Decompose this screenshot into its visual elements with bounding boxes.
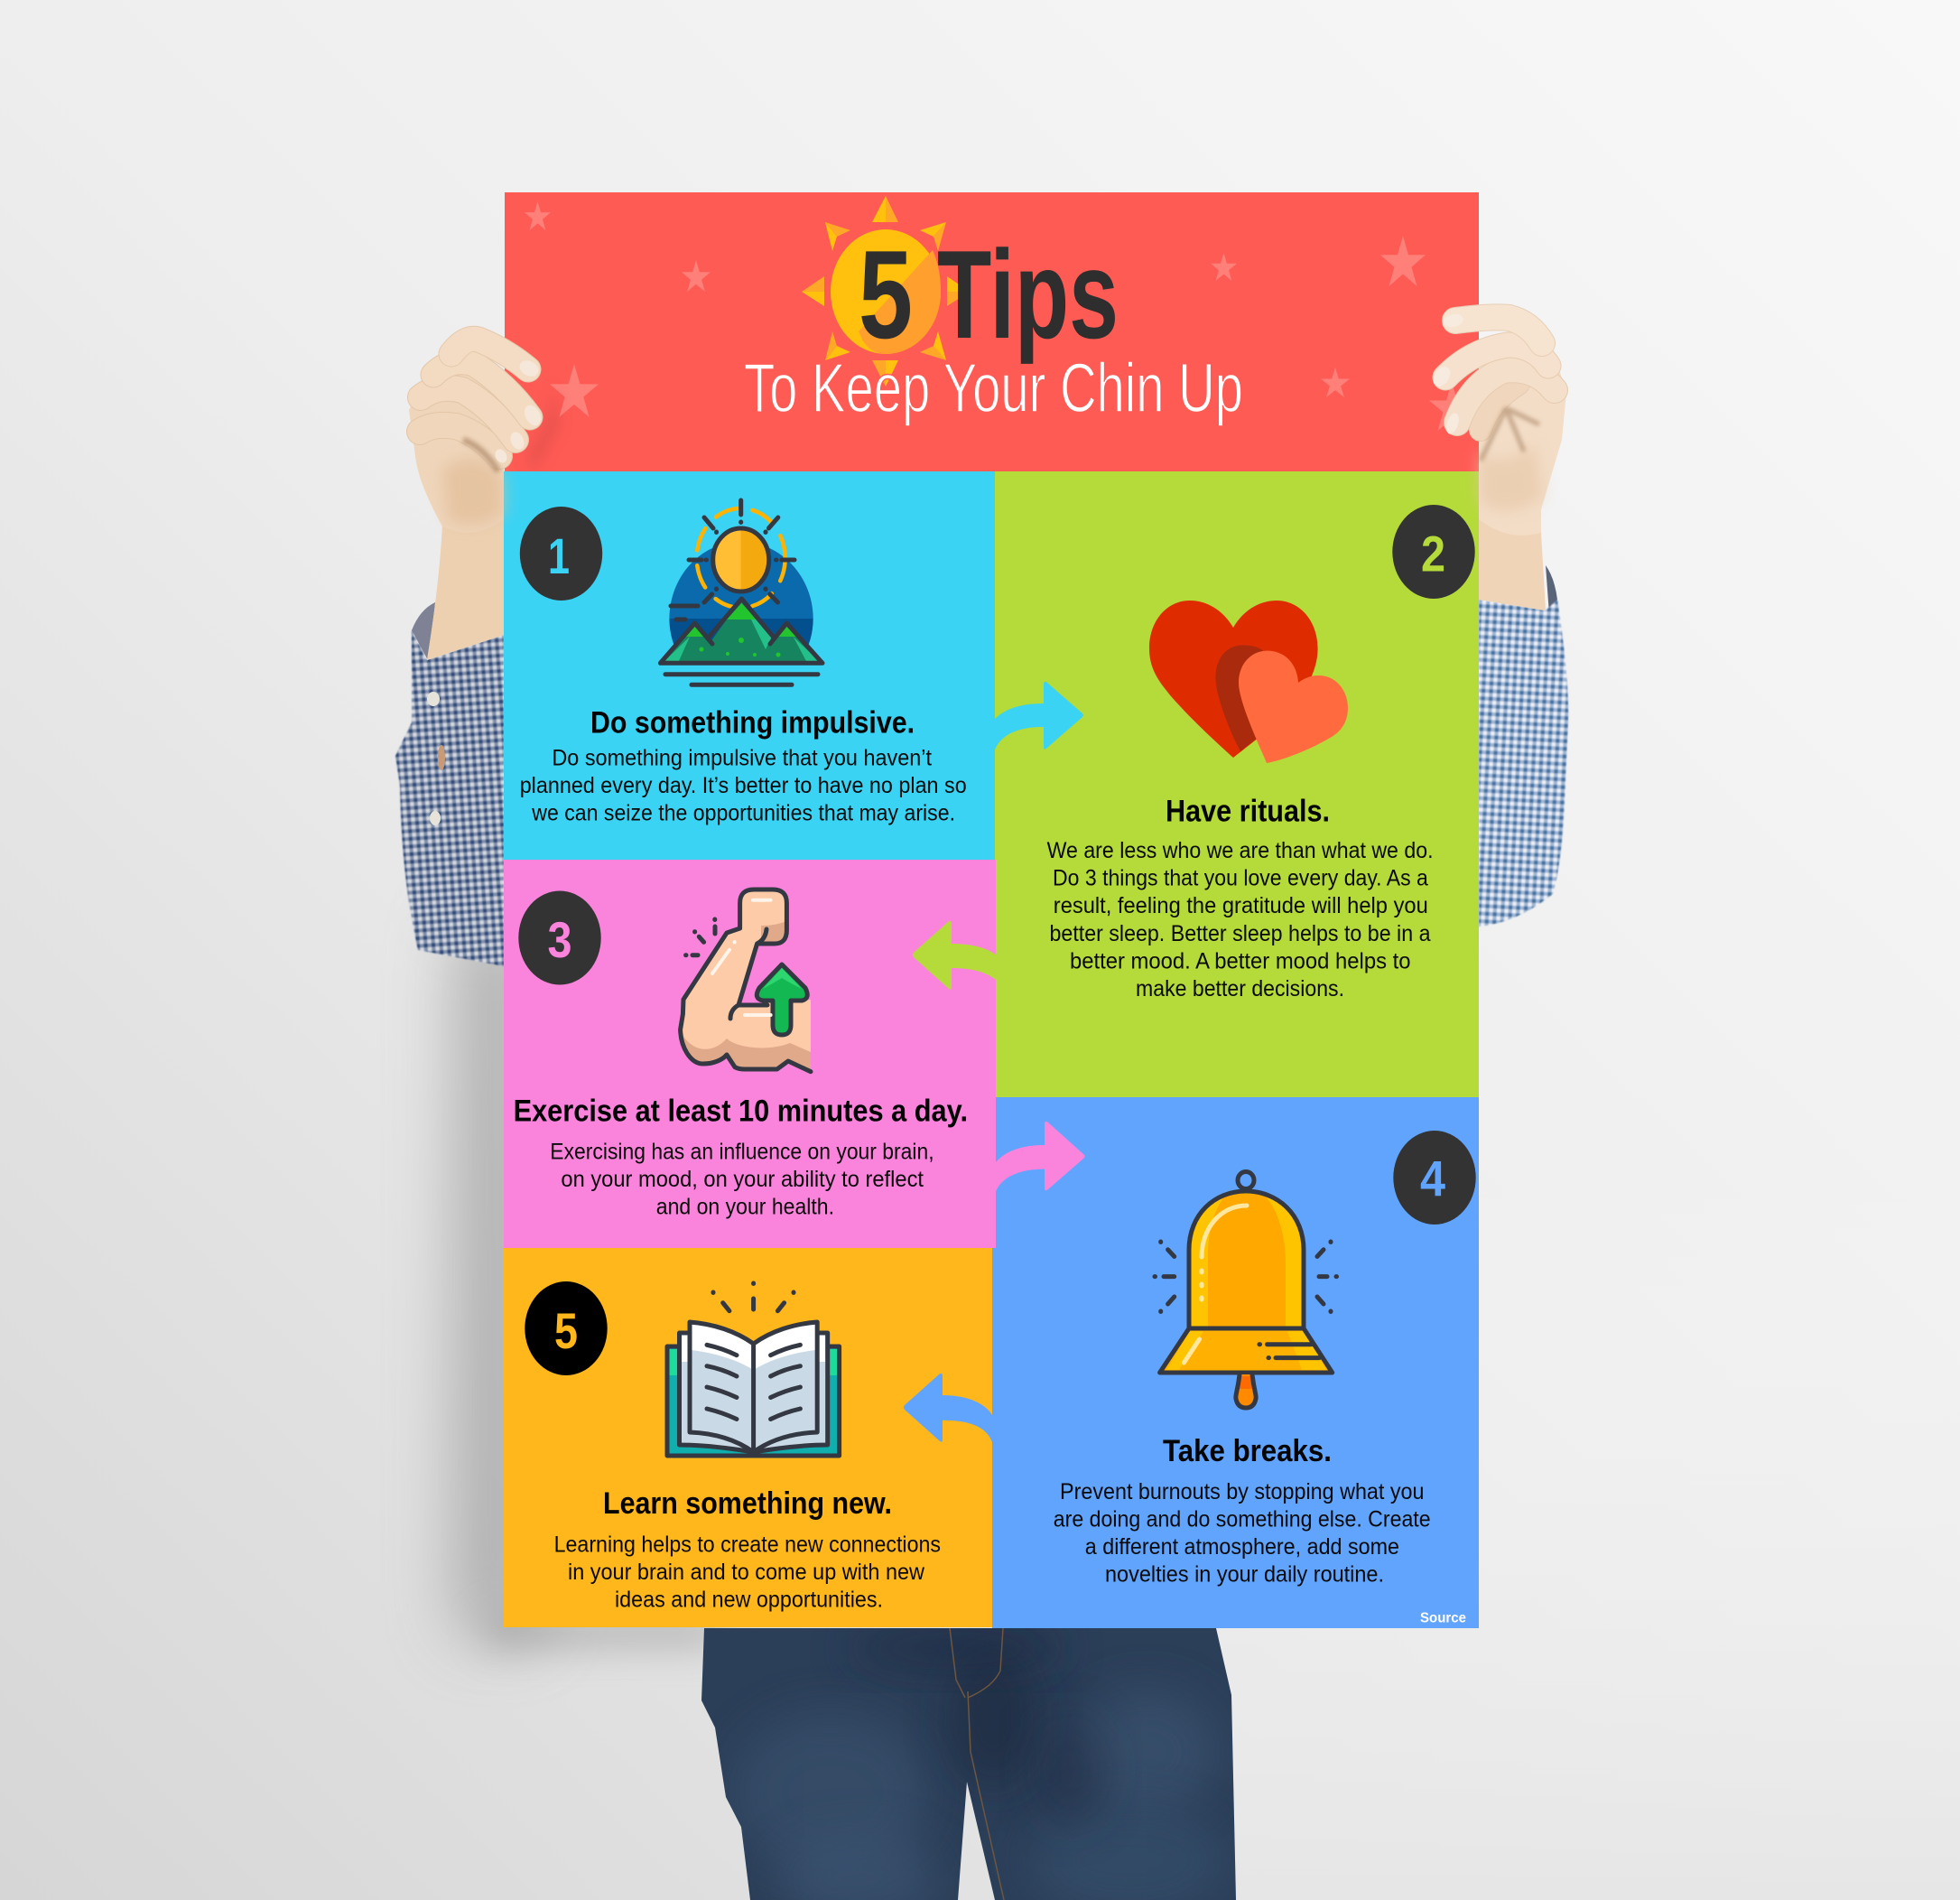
- badge 3: 3: [547, 911, 572, 968]
- body 3: Exercising has an influence on your brain,: [550, 1139, 934, 1164]
- title: 5 Tips: [859, 225, 1119, 365]
- title: 5 Tips: 5: [859, 225, 913, 365]
- body 3: and on your health.: [656, 1195, 834, 1220]
- person: jeans: [701, 1625, 1236, 1900]
- body 5: Learning helps to create new connections: [554, 1532, 941, 1557]
- badge 5: [525, 1281, 608, 1375]
- person: left shirt sleeve: [395, 602, 504, 966]
- body 2: better mood. A better mood helps to: [1070, 948, 1410, 973]
- body 5: ideas and new opportunities.: [615, 1587, 883, 1612]
- heading 5: Learn something new.: [603, 1486, 892, 1521]
- title: 5 Tips: Tips: [937, 225, 1119, 365]
- icon: open book: [667, 1283, 840, 1456]
- body 4: a different atmosphere, add some: [1085, 1534, 1399, 1560]
- person: left hand and forearm: [409, 339, 560, 660]
- badge 2: 2: [1421, 526, 1445, 582]
- icon: hearts: [1149, 601, 1348, 763]
- body 3: on your mood, on your ability to reflect: [561, 1167, 924, 1192]
- body 1: Do something impulsive that you haven’t: [552, 746, 932, 771]
- panel: 4 blue: [992, 1097, 1479, 1628]
- body 4: novelties in your daily routine.: [1105, 1562, 1384, 1588]
- heading 3: Exercise at least 10 minutes a day.: [514, 1094, 968, 1129]
- stars: [525, 201, 1474, 431]
- body 2: Do 3 things that you love every day. As a: [1053, 866, 1428, 891]
- badge 1: [520, 507, 602, 601]
- badge 1: 1: [548, 527, 570, 584]
- body 2: [1047, 838, 1434, 1001]
- arrow: pink, step 3 to 4: [996, 1122, 1085, 1192]
- icon: flexed arm with arrow: [681, 889, 811, 1072]
- source label: Source: [1420, 1611, 1466, 1626]
- body 2: We are less who we are than what we do.: [1047, 838, 1434, 863]
- body 5: in your brain and to come up with new: [568, 1560, 925, 1585]
- body 1: [520, 746, 967, 825]
- person: right hand and forearm: [1430, 312, 1566, 610]
- body 4: are doing and do something else. Create: [1054, 1507, 1431, 1532]
- panel: 3 pink: [504, 860, 996, 1248]
- badge 4: [1393, 1131, 1476, 1225]
- icon: sun: [802, 196, 970, 387]
- person: right shirt sleeve: [1479, 565, 1568, 927]
- heading 1: Do something impulsive.: [590, 706, 915, 740]
- arrow: cyan, step 1 to 2: [995, 682, 1083, 750]
- body 2: better sleep. Better sleep helps to be in a: [1049, 921, 1431, 946]
- icon: sunrise over mountains: [660, 500, 822, 685]
- badge 2: [1392, 505, 1475, 599]
- icon: bell: [1155, 1172, 1336, 1408]
- body 2: make better decisions.: [1136, 976, 1344, 1001]
- body 1: planned every day. It’s better to have no plan so: [520, 773, 967, 798]
- body 1: we can seize the opportunities that may arise.: [531, 800, 955, 825]
- badge 3: [518, 890, 601, 984]
- badge 4: 4: [1420, 1150, 1445, 1206]
- badge 5: 5: [554, 1302, 578, 1359]
- panel: 1 cyan: [504, 471, 995, 860]
- body 4: [1054, 1479, 1431, 1588]
- panel: 5 orange: [504, 1248, 992, 1627]
- panel: 2 green: [995, 471, 1479, 1097]
- body 2: result, feeling the gratitude will help you: [1054, 893, 1428, 918]
- arrow: blue, step 4 to 5: [904, 1374, 992, 1442]
- body 3: [550, 1139, 934, 1220]
- arrow: green, step 2 to 3: [913, 921, 996, 990]
- body 5: [554, 1532, 941, 1612]
- subtitle: To Keep Your Chin Up: [744, 349, 1243, 427]
- heading 2: Have rituals.: [1166, 795, 1330, 829]
- body 4: Prevent burnouts by stopping what you: [1060, 1479, 1425, 1504]
- heading 4: Take breaks.: [1163, 1434, 1332, 1468]
- panel: header: [505, 192, 1479, 471]
